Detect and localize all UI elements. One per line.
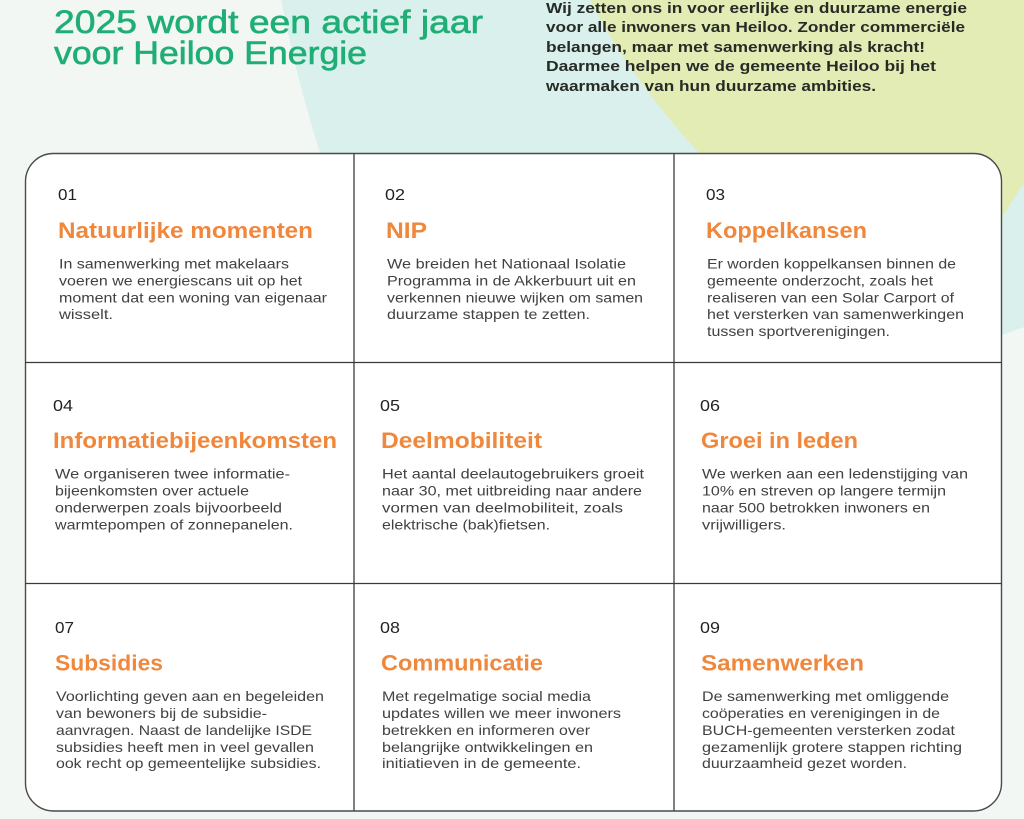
body: Voorlichting geven aan en begeleiden (56, 688, 324, 704)
body: coöperaties en verenigingen in de (702, 705, 940, 721)
panel: 05 Deelmobiliteit (380, 398, 644, 532)
body: wisselt. (58, 306, 113, 322)
body (707, 256, 964, 339)
body: initiatieven in de gemeente. (382, 755, 581, 771)
intro text: waarmaken van hun duurzame ambities. (545, 78, 876, 95)
panel: 02 NIP (385, 187, 643, 322)
body (382, 688, 621, 771)
body: moment dat een woning van eigenaar (59, 290, 327, 306)
body: van bewoners bij de subsidie- (56, 705, 267, 721)
heading: Subsidies (55, 650, 163, 676)
heading: Koppelkansen (706, 218, 867, 243)
body: Het aantal deelautogebruikers groeit (382, 466, 644, 482)
body (382, 466, 644, 532)
body (58, 256, 327, 322)
body: vormen van deelmobiliteit, zoals (382, 500, 623, 516)
body: belangrijke ontwikkelingen en (382, 739, 593, 755)
intro text: voor alle inwoners van Heiloo. Zonder commerciële (546, 19, 965, 36)
body: voeren we energiescans uit op het (59, 272, 302, 288)
body: onderwerpen zoals bijvoorbeeld (55, 500, 282, 516)
intro text (545, 0, 967, 95)
heading: Informatiebijeenkomsten (53, 428, 337, 453)
body: verkennen nieuwe wijken om samen (387, 290, 643, 306)
card grid (26, 154, 1002, 811)
body: Er worden koppelkansen binnen de (707, 256, 956, 272)
number 04: 04 (53, 398, 73, 415)
number 06: 06 (700, 398, 720, 415)
body: bijeenkomsten over actuele (55, 482, 249, 498)
number 05: 05 (380, 398, 400, 415)
body: realiseren van een Solar Carport of (707, 290, 954, 306)
title (54, 4, 483, 71)
body: naar 30, met uitbreiding naar andere (382, 482, 642, 498)
body: vrijwilligers. (702, 516, 786, 532)
body: gezamenlijk grotere stappen richting (702, 739, 962, 755)
body: ook recht op gemeentelijke subsidies. (56, 755, 321, 771)
panel: 08 Communicatie (380, 620, 621, 771)
number 07: 07 (55, 620, 74, 637)
number 02: 02 (385, 187, 405, 204)
body (702, 688, 962, 771)
body: aanvragen. Naast de landelijke ISDE (56, 722, 312, 738)
panel: 03 Koppelkansen (706, 187, 964, 339)
number 08: 08 (380, 620, 400, 637)
body: updates willen we meer inwoners (382, 705, 621, 721)
panel: 01 Natuurlijke momenten (58, 187, 327, 322)
body: duurzame stappen te zetten. (387, 306, 590, 322)
intro text: Wij zetten ons in voor eerlijke en duurzame energie (546, 0, 967, 17)
heading: Deelmobiliteit (381, 428, 543, 453)
number 01: 01 (58, 187, 77, 204)
body (702, 466, 968, 532)
intro text: Daarmee helpen we de gemeente Heiloo bij het (546, 58, 936, 75)
body: het versterken van samenwerkingen (707, 306, 964, 322)
body: subsidies heeft men in veel gevallen (56, 739, 314, 755)
panel: 04 Informatiebijeenkomsten (53, 398, 337, 532)
intro text: belangen, maar met samenwerking als kracht! (546, 39, 925, 56)
body: gemeente onderzocht, zoals het (707, 272, 933, 288)
body: warmtepompen of zonnepanelen. (54, 516, 293, 532)
body: In samenwerking met makelaars (59, 256, 289, 272)
body (56, 688, 324, 771)
heading: Samenwerken (701, 650, 864, 676)
body: We werken aan een ledenstijging van (702, 466, 968, 482)
body: We organiseren twee informatie- (55, 466, 290, 482)
body: De samenwerking met omliggende (702, 688, 949, 704)
heading: NIP (386, 218, 427, 243)
teal background shape (281, 0, 1024, 335)
number 03: 03 (706, 187, 725, 204)
body: naar 500 betrokken inwoners en (702, 500, 930, 516)
lime background shape (590, 0, 1024, 217)
panel: 09 Samenwerken (700, 620, 962, 771)
heading: Groei in leden (701, 428, 858, 453)
heading: Natuurlijke momenten (58, 218, 313, 243)
body: BUCH-gemeenten versterken zodat (702, 722, 955, 738)
heading: Communicatie (381, 650, 543, 676)
title: voor Heiloo Energie (54, 35, 367, 71)
body: Programma in de Akkerbuurt uit en (387, 272, 636, 288)
panel: 07 Subsidies (55, 620, 324, 771)
body: betrekken en informeren over (382, 722, 590, 738)
body (54, 466, 293, 532)
body: duurzaamheid gezet worden. (702, 755, 907, 771)
body: tussen sportverenigingen. (707, 323, 890, 339)
body (387, 256, 643, 322)
number 09: 09 (700, 620, 720, 637)
body: elektrische (bak)fietsen. (382, 516, 550, 532)
body: 10% en streven op langere termijn (702, 482, 946, 498)
title: 2025 wordt een actief jaar (54, 4, 483, 40)
body: Met regelmatige social media (382, 688, 591, 704)
panel: 06 Groei in leden (700, 398, 968, 532)
body: We breiden het Nationaal Isolatie (387, 256, 626, 272)
